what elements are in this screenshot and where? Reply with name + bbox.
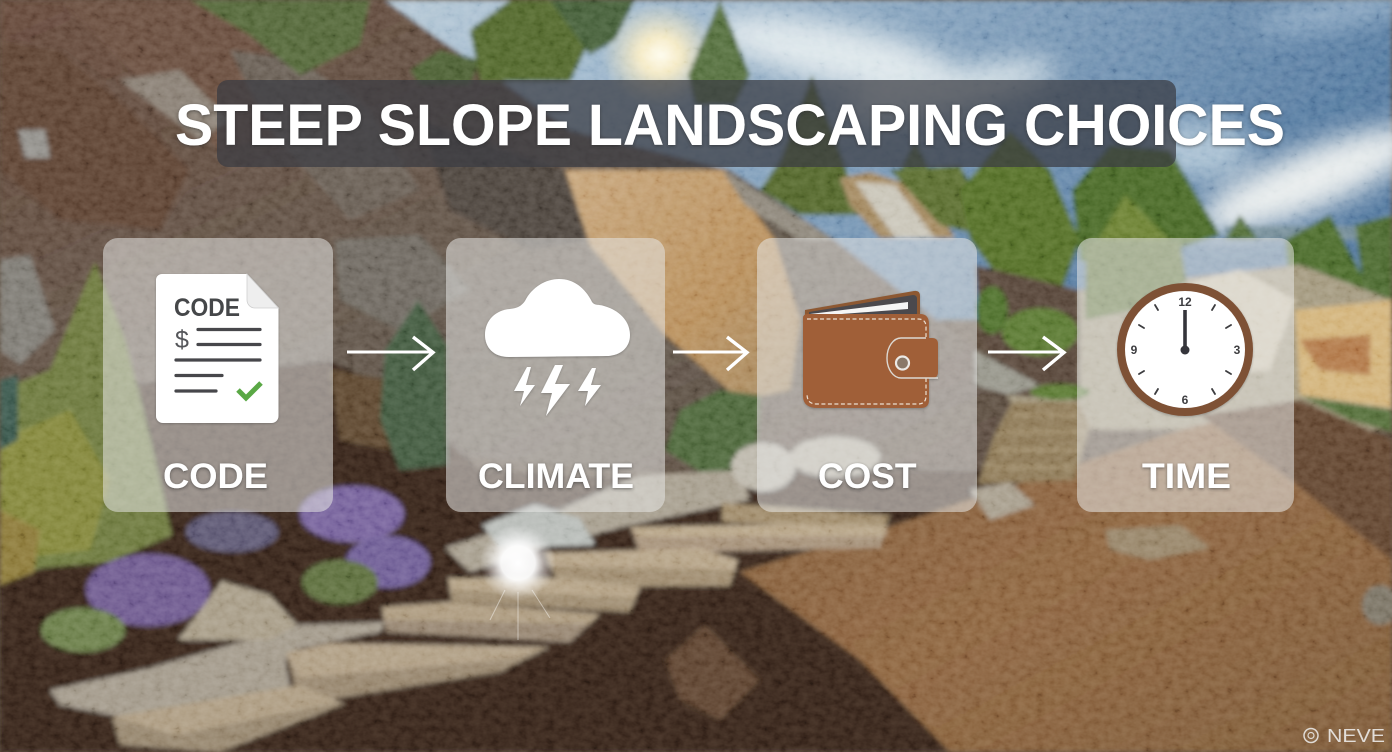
panel: cost bbox=[757, 238, 977, 512]
label: time: TIME bbox=[1142, 457, 1231, 496]
title: STEEP SLOPE LANDSCAPING CHOICES bbox=[175, 93, 1285, 158]
label: code: CODE bbox=[163, 457, 268, 496]
arrow: code to climate bbox=[347, 337, 433, 370]
trees at top bbox=[190, 0, 370, 75]
stairs bbox=[722, 503, 890, 528]
label: cost: COST bbox=[818, 457, 916, 496]
centre conifer bbox=[380, 300, 447, 470]
panel: time bbox=[1077, 238, 1294, 512]
upper stairs bbox=[978, 402, 1090, 484]
panel: climate bbox=[446, 238, 665, 512]
icon: clock bbox=[1117, 283, 1253, 416]
label: climate: CLIMATE bbox=[478, 457, 634, 496]
icon: wallet bbox=[803, 291, 938, 408]
rock face bbox=[0, 0, 1060, 480]
panel: code bbox=[103, 238, 333, 512]
right trees bbox=[890, 165, 1000, 240]
icon: clock: 12 bbox=[1178, 295, 1192, 309]
left conifer bbox=[0, 262, 172, 585]
right rocks bbox=[1000, 265, 1392, 430]
icon: code document bbox=[156, 274, 278, 423]
arrow: climate to cost bbox=[673, 337, 747, 370]
icon: clock: 6 bbox=[1182, 393, 1189, 407]
gravel bbox=[50, 622, 385, 718]
icon: code document: CODE bbox=[174, 294, 240, 322]
flare on stairs bbox=[480, 525, 556, 640]
icon: clock: 9 bbox=[1131, 343, 1138, 357]
soil bbox=[0, 360, 1010, 752]
rocks bbox=[178, 581, 297, 640]
watermark: neve bbox=[1304, 726, 1385, 746]
lavender bbox=[86, 554, 210, 626]
arrow: cost to time bbox=[988, 337, 1064, 370]
icon: clock: 3 bbox=[1234, 343, 1241, 357]
tan rock bbox=[565, 170, 800, 400]
mulch hillside bbox=[740, 400, 1392, 752]
icon: code document: $ bbox=[175, 326, 189, 354]
icon: storm cloud bbox=[485, 279, 630, 416]
title banner bbox=[217, 80, 1176, 167]
watermark: neve: NEVE bbox=[1327, 726, 1385, 746]
